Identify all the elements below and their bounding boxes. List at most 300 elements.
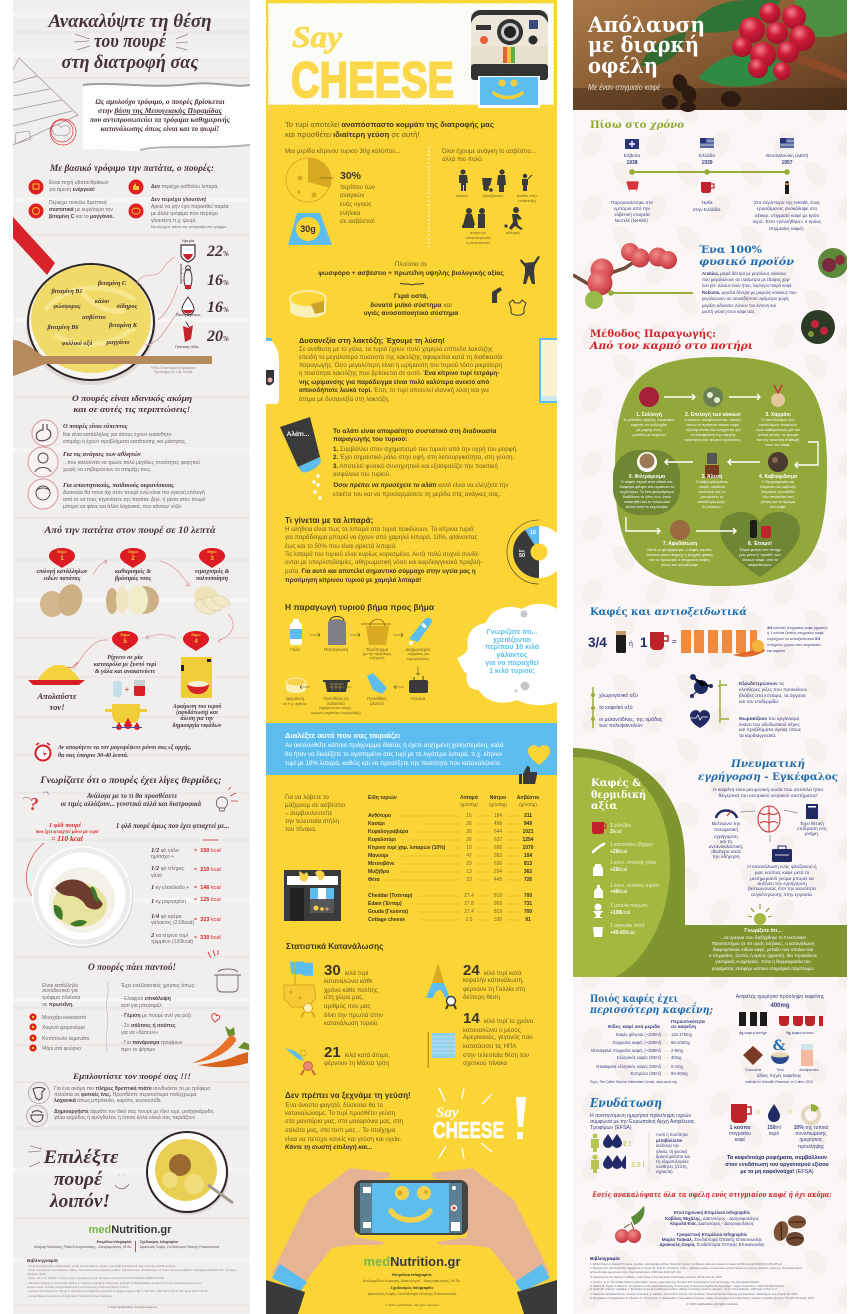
references: © 2015 medNutrition. All rights reserved [686,1302,738,1306]
stat: USA: 14 κιλά τυρί το χρόνο [463,1010,534,1027]
people needing calcium: παιδιά στην [517,193,537,198]
blue banner [266,723,557,775]
safe caffeine intake: Institute for Scientific Research on Coffee, 2015 [745,1080,813,1084]
timeline: Νεστλέ (Nestlé). [615,217,649,224]
table: cheese nutrition: 29 [466,861,472,867]
alternative uses list: - Για πανάρισμα τροφίμων [121,1040,183,1046]
mental alertness section: εγρήγορση - Εγκέφαλος [698,770,838,783]
clock note: Αν αποφύγετε να τον μαγειρέψετε μόνοι σας εξ αρχής, [57,744,191,752]
table note: – συμβουλευτείτε [285,810,333,817]
mental alertness section: επίδραση στη [797,826,827,832]
pairing list: Μοσχάρι κοκκινιστό [42,1014,87,1021]
lactose text: οποιοδήποτε λευκό τυρί. Έτσι, το τυρί αποτελεί ιδανική λύση και για [299,387,489,394]
nutrient percentages: Πρόσληψη σε 1 φλ πουρέ [154,370,193,374]
antioxidant equation: και καρότα [767,649,786,653]
production steps row 2: (αφαίρεση και αποχή - [319,706,353,710]
title: στη διατροφή σας [62,52,199,73]
table: cheese nutrition: 726 [524,877,532,883]
hydration equation [725,1104,829,1175]
timeline: Θεσσαλονίκη (ΔΕΘ) [766,153,809,159]
process blob: ταξινομούνται και ελέγχονται για [686,427,741,432]
antioxidant effects [690,674,808,739]
icon: salt shaker [280,417,322,500]
caffeine table: Ντεκαφεϊνέ στιγμιαίος καφές (~200ml) [591,1048,662,1053]
torn paper intro: Ως αμυλούχο τρόφιμο, ο πουρές βρίσκεται [95,97,225,106]
lactose text: επειδή το μεγαλύτερο ποσοστό της λακτόζης αφαιρείται κατά τη διαδικασία [299,354,503,361]
hydration section: ηλικία, τη φυσική [656,1149,688,1154]
chart: fat range donut: 50 [519,553,525,559]
caffeine table: Πηγή: The Coffee Science Information Centre, www.cosic.org [590,1080,677,1084]
did you know text: διαφορετικών ειδών καφέ, μεταξύ των οποίων και [713,946,813,953]
taste text: στα μανιτάρια μας, στα μακαρόνια μας, στη [285,1118,404,1125]
heading: antioxidants: Καφές και αντιοξειδωτικά [590,606,747,618]
table: cheese nutrition: 700 [524,909,532,915]
plain puree callout: που έχει φτιαχτεί μόνο με νερό [35,829,99,835]
production steps row 2: καλούπια [327,701,345,706]
nutrient percentages: *ΗΠΑ Συνιστώμενη Ημερήσια [151,366,195,370]
people needing calcium [441,148,537,245]
antioxidant equation: ή [629,641,633,648]
mental alertness section: Πνευματική [730,757,805,770]
hero image [573,0,847,112]
step labels: τεμαχισμός & [195,568,230,575]
production steps row 1: Γάλα [290,647,300,652]
stat: France: δεύτερη θέση [463,994,500,1001]
stat: USA: Αμερικανός, γεγονός που [463,1034,533,1041]
hydration equation: 10% της τυπικά [794,1124,828,1131]
people needing calcium: ανάπτυξη [518,198,536,203]
pairing list: συνοδευτικό για [42,987,78,994]
enjoy plate [28,665,85,712]
taste text: είναι να πετύχει κανείς και γεύση και υγεία. [285,1136,402,1143]
rich in nutrients: δυνατό μυϊκό σύστημα και [370,302,452,309]
process blob: θη κόκκων. [702,504,722,509]
logo: medNutrition.gr [88,1224,172,1236]
chart: fat range donut: έως [519,549,525,553]
pairing list: σε πρωτεΐνη. [42,1002,74,1008]
benefits list [28,179,229,229]
natural product text: Robusta, μεγάλα δέντρα με μικρούς κόκκους που [702,290,797,295]
table: cheese nutrition: Λιπαρά [460,795,479,801]
antioxidant equation: περιέχουν τα αντιοξειδωτικά 5.5 [767,637,820,641]
antioxidant equation: 1 [640,635,648,650]
caffeine table: 65-100mg [671,1040,691,1045]
wooden spoon [13,340,212,376]
taste text: Ένα άνοστο φαγητό, δύσκολα θα το [284,1102,384,1109]
process blob: πτουν οι πράσινοι κόκκοι καφέ, [686,422,740,427]
enrich section: Εμπλουτίστε τον πουρέ σας !!! [72,1071,191,1081]
safe caffeine intake: άλλες πηγές καφεΐνης [757,1072,802,1078]
process blob: δίσματος προσδίδει [761,489,795,494]
caffeine table: Ντεκαφεϊνέ ελληνικός καφές (50ml) [596,1064,662,1069]
antioxidant effects: και τον επιδερμίδα. [739,699,779,705]
step labels: βράσιμός τους [114,575,151,582]
blue banner: τυρί με 10% λιπαρά, καθώς και να προσέξετε την ποσότητα που καταναλώνετε. [285,760,502,767]
caffeine table: Ποιός καφές έχει [590,993,678,1005]
title: Ανακαλύψτε τη θέση [48,11,212,32]
antioxidant compounds [591,687,663,729]
process blob: απαιτηθεί και το τελειωτικό [624,499,670,504]
natural product text: Ένα 100% [698,245,763,256]
mental alertness section: την οδήγηση [712,853,740,860]
title: του πουρέ [94,31,166,52]
caffeine table: 0-1mg [671,1064,684,1069]
flakes package: Αφαίρεση του νερού [172,703,221,710]
benefits list: Είναι πηγή υδατανθράκων [49,179,109,186]
process blob: Η θερμοκρασία και [762,479,794,484]
puree additions list: = 323 kcal [194,917,221,923]
timeline: Ελβετία [624,153,640,159]
rich in nutrients: υγιές ανοσοποιητικό σύστημα [364,310,458,317]
table: cheese nutrition: 362 [524,869,532,875]
safe caffeine intake: Σοκολάτα [745,1068,762,1072]
stat: Greece [284,961,383,1027]
heading: ideal cases [72,393,192,414]
references [27,1258,237,1309]
green calorie panel: 2kcal [610,829,622,835]
production steps row 1: πήγματος και [407,652,429,656]
process blob [613,357,827,586]
puree additions list: γάλακτος (210kcal) [151,919,194,926]
heading: ideal cases: και σε αυτές τις περιπτώσεις! [74,404,190,414]
green calorie panel: 1 σφηνάκι ποτό [610,922,645,929]
references: © 2014 medNutrition. All rights reserved [107,1305,157,1309]
icon: light bulb [748,904,772,925]
mental alertness section: Έχει θετική [799,820,824,827]
benefits list: γλουτένη π.χ. ψωμί. [151,217,196,224]
caffeine table: Καφές φίλτρου (~200ml) [616,1032,662,1037]
stat: France [426,962,526,1009]
bowl of puree [146,1131,233,1215]
flakes package: (αφυδάτωση) και [176,709,218,716]
pot of mashed potato: φυλλικό οξύ [62,340,92,347]
phone with cheese smile [354,1180,468,1235]
fat text: προτίμηση κίτρινου τυριού με χαμηλά λιπαρά! [285,577,421,584]
salt text: παραγωγής του τυριού: [333,436,407,443]
table note [285,794,346,833]
process blob: 6. Φιλτράρισμα [629,474,666,480]
process blob: Ο καβουρδισμένος [696,479,728,484]
hydration equation: με τα μη καφεϊνούχα! (EFSA) [740,1169,814,1175]
intro [285,122,494,138]
benefits list: συστατικά με κυριότερα την [49,206,113,213]
table: cheese nutrition: 383 [494,853,502,859]
safe caffeine intake: 5χ καφές/κούπα [786,1031,814,1035]
heading: calories: οι τιμές αλλάζουν... γευστικά αλλά και διατροφικά [61,801,202,808]
pot of mashed potato: σίδηρος [117,303,138,310]
hydration section: 2 l [623,1141,631,1148]
stat: Malta: φέρνουν τη Μάλτα τρίτη [324,1060,390,1067]
antioxidant equation: 3/4 κούπας στιγμιαίος καφέ (φραπέ) [767,626,828,630]
hydration section: Ενυδάτωση [589,1096,662,1110]
hydration section: δραστηριότητα και [656,1154,690,1159]
caffeine table: 115-175mg [671,1032,693,1037]
credits [34,1240,220,1252]
heading: production method: Από τον καρπό στο ποτήρι [589,339,753,352]
calcium scale: ενήλικα [340,210,361,217]
green calorie panel: 1 φλιτζάνι [610,822,631,829]
clock note: θα σας έπαιρνε 30-40 λεπτά. [58,752,129,759]
coffee cherries branch [573,243,693,309]
pot of mashed potato: κάλιο [95,298,109,305]
references: 7. Stavric B. Methylxanthines: Toxicity to humans. 2. Caffeine. Food Chem Toxicol. The American Chemical Society Meeting and Exposition. Washington, DC, August 28, 2005 [590,1292,798,1296]
table: cheese nutrition: 2.5 [466,917,473,923]
table: cheese nutrition: 23 [466,877,472,883]
table: cheese nutrition: 30 [466,829,472,835]
callout bubble: χρειάζονται [493,637,531,644]
benefits list: Περιέχει ποικίλα θρεπτικά [49,199,107,206]
natural product text: μεγαλώνουν σε οποιαδήποτε υψόμετρο χωρίς [702,296,789,301]
credits: Αδαμαρ Μαλιδάκη, Ρόλανδ Αυγουστάκης - Διατροφολόγος, M.Sc. [34,1245,132,1249]
say cheese slogan: CHEESE [433,1117,504,1143]
safe caffeine intake: 400mg [770,1003,790,1009]
timeline: εμπόριο από την [614,205,650,212]
heading: ideal cases: Ο πουρές είναι ιδανικός ακόμη [72,393,192,403]
hero image: Με έναν στιγμιαίο καφέ [588,83,660,92]
timeline [611,138,822,232]
heading: calories: ? [30,794,38,814]
step labels: & γάλα και ανακατεύετε [95,668,156,675]
heading: potato to puree: Από την πατάτα στον πουρέ σε 10 λεπτά [43,525,216,536]
caffeine table: Στιγμιαίος καφές (~200ml) [613,1040,662,1045]
people needing calcium: θηλάζουσες [483,193,503,198]
alternative uses list: πριν το ψήσιμο [121,1046,155,1053]
callout bubble: για να παραχθεί [485,660,539,667]
table: cheese nutrition: 10 [466,845,472,851]
table: cheese nutrition: Μανούρι [368,853,389,859]
heading: puree goes with everything: Ο πουρές πάει παντού! [88,962,176,972]
alternative uses list: - Σε σάλτσες ή σούπες [121,1023,176,1029]
alternative uses list: αντί για μπεσαμέλ [121,1002,162,1009]
process blob: για να προκύψει ο στιγμιαίος καφές, [649,557,711,562]
did you know text [709,928,817,971]
antioxidant equation: ή 1 κούπα ζεστός στιγμιαίος καφέ; [767,631,824,635]
table: cheese nutrition: 330 [494,917,502,923]
table: cheese nutrition: Ασβέστιο [517,795,539,801]
table: cheese nutrition: 819 [494,893,502,899]
heading: production method: Μέθοδος Παραγωγής: [590,327,716,340]
stat: Greece: 30 κιλά τυρί [324,962,369,979]
green calorie panel: 1 κουτ. σούπας γάλα [610,859,656,866]
icon: cherries with leaf [615,1206,645,1243]
timeline: 1938 [626,160,638,166]
lactose text: παραγωγής. Όσο μεγαλύτερη είναι η ωρίμανση του τυριού τόσο μικρότερη [299,362,502,369]
stat: Greece: στη χώρα μας, [324,994,364,1001]
ideal cases list: ...που καλούνται να τρώνε πολύ μεγάλες ποσότητες φαγητού [63,459,200,466]
safe caffeine intake [736,993,825,1084]
title [48,11,212,73]
nutrient percentages: Πεπτική οδός [175,344,199,349]
fat text: έως και το 50% που είναι αρκετά λιπαρά. [285,543,397,550]
heading: calories [23,775,238,814]
table: cheese nutrition: 27.4 [464,893,474,899]
did you know text: γαστρικές ενοχλήσεις. Ούτε η θερμοκρασία του [715,958,811,964]
table: cheese nutrition: 26 [466,837,472,843]
heading: potato basics: Με βασικό τρόφιμο την πατάτα, ο πουρές: [49,163,214,173]
closing message [28,1146,129,1212]
table: cheese nutrition: 636 [494,861,502,867]
taste text: καταναλώναμε. Το τυρί προσθέτει γεύση [285,1110,396,1117]
green calorie panel: 1 κουτ. σούπας σιρόπι [610,882,660,889]
pot of mashed potato: ασβέστιο [82,314,106,321]
references: 3. Statement on the Safety of Caffeine. Committee of the European Food Safety Authority, EFSA Journal, 2015. [590,1275,723,1279]
credits: Καβίλας Μιχάλης, Διαιτολόγος - Διατροφολόγος [665,1216,759,1221]
process blob: όλα απαιτείται στη [762,494,794,499]
potatoes illustration [40,584,230,617]
step badges: Βήμα [191,633,201,637]
process blob: 1. Συλλογή [636,412,662,418]
timeline: 1939 [701,160,713,166]
panel: say cheese infographic [258,0,565,1314]
ideal cases list: Ο πουρές είναι εύπεπτος [63,423,128,430]
antioxidant effects: έναντι του οξειδωτικού στρες [739,721,800,728]
table: cheese nutrition: 819 [494,909,502,915]
references: Βιβλιογραφία [590,1256,620,1261]
table: cheese nutrition: Cheddar (Τσένταρ) [368,893,413,899]
step badges: Βήμα [57,550,67,554]
table: cheese nutrition: Κεφαλογραβιέρα [368,829,409,835]
salt text: ετικέτα του και να προσαρμόσετε τη μερίδα στις ανάγκες σας. [333,491,501,498]
people needing calcium: άτομα με [470,230,486,235]
pairing list: Χοιρινό ψαρονέφρι [42,1024,85,1031]
table: cheese nutrition: Μυζήθρα [368,869,390,875]
antioxidant equation [588,626,828,657]
pot of mashed potato: βιταμίνη Β6 [46,324,79,331]
hydration section: μεταβάλλεται [656,1138,683,1143]
table: cheese nutrition: 813 [524,861,532,867]
hydration equation: ημερήσιας [799,1136,823,1143]
process blob: διάρκεια του καβουρ- [760,484,797,489]
table: cheese nutrition: 695 [494,845,502,851]
stat: Malta: 21 κιλά κατά άτομο, [324,1044,390,1061]
table: cheese nutrition: Είδη τυριών [368,795,397,801]
caffeine table: 40mg [671,1055,682,1060]
timeline: ελβετική εταιρεία [614,211,650,218]
callout bubble [457,604,557,705]
nutrient percentages: 16% [207,272,229,289]
hydration equation: πρόσληψης [798,1143,825,1150]
step badges: 2 [131,555,135,562]
alternative uses list [120,982,195,1053]
process blob: όπως τον γνωρίζουμε. [661,562,699,567]
nutrient percentages: 20% [206,328,229,345]
table: cheese nutrition: 26 [466,821,472,827]
did you know text: Πανεπιστήμιο σε 40 υγιείς ενήλικες, η κατανάλωση [712,940,815,946]
green calorie panel: 1 κουταλάκι ζάχαρη [610,841,653,848]
people needing calcium: ή οστεοπενία [466,240,490,245]
references: 8. Zampelas A, Panagiotakos D, Pitsavos C, Chrysohoou C, Stefanadis C. Associations between coffee consumption and inflammatory markers in healthy persons: The ATTICA study, 2015 [590,1296,814,1300]
plain puree callout: 1 φλδ πουρέ [49,822,81,829]
mental alertness section: Βελτιώνει την [712,820,741,827]
hydration equation: Τα καφεϊνούχα ροφήματα, συμβάλλουν [727,1155,827,1161]
salt text: Όσοι πρέπει να προσέχετε το αλάτι καλό είναι να ελέγξετε την [333,482,508,489]
table: cheese nutrition: Gouda (Γκούντα) [368,909,408,915]
fat text: ονται με υπερλιπιδαιμίες, αθηρωματική νόσο και καρδιαγγειακά προβλή- [285,559,482,566]
table: cheese nutrition: Κίτρινο τυρί χαμ. λιπαρών (10%) [368,845,446,851]
hydration equation: = [756,1108,761,1117]
production steps row 1: Τυρόπηγμα [366,647,389,652]
hydration section: 2.5 l [631,1162,645,1169]
table: cheese nutrition: 700 [524,893,532,899]
taste text: σαλάτα μας, στο τοστ μας... Το στοίχημα [285,1127,396,1134]
people needing calcium: αλλά πιο πολύ: [442,156,484,163]
pairing list: Ψάρι στο φούρνο [42,1045,81,1052]
hydration section: τις κλιματολογικές [656,1159,689,1164]
enrich section: λαχανικά όπως μπρόκολο, καρότο, κουνουπίδι. [54,1097,162,1104]
salt text: 3. Αποτελεί φυσικό συντηρητικό και εξασφαλίζει την ποιοτική [333,463,498,470]
step labels: Ρίχνετε σε μία [107,654,143,661]
credits: Σχεδιασμός Infographic [391,1286,433,1290]
hydration equation: νερό [769,1130,779,1137]
calcium scale: 30% [340,170,362,182]
heading: production method [589,327,753,352]
table: cheese nutrition: Φέτα [368,877,380,883]
pyramid sketch [13,58,78,145]
closing message: λοιπόν! [49,1192,110,1212]
process blob: Τελικά φτάνει στο ποτήρι [739,547,781,552]
fat text: Τα λιπαρά του τυριού είναι κυρίως κορεσμένα. Αυτά πολύ συχνά συνδέ- [285,551,480,558]
plate with meat [32,846,133,948]
table: cheese nutrition: 1070 [522,845,534,851]
stat: Greece: αριθμός που μας [324,1003,370,1010]
process blob: Ο καφές περνά από ειδικά και- [621,479,674,484]
process blob: μας μόνο η "αγαθά" των [739,552,781,557]
process blob: 8. Έτοιμο! [748,541,772,547]
pairing list [29,982,108,1052]
process blob: καφές αλέθεται [699,484,725,489]
hero image: με διαρκή [588,32,699,57]
mental alertness section: διεγερτικό του κεντρικού νευρικού συστήματος! [718,792,818,799]
salt text: Το αλάτι είναι απαραίτητο συστατικό στη διαδικασία [333,427,496,435]
green calorie panel: Καφές & [591,778,641,789]
taste text: Δεν πρέπει να ξεχνάμε τη γεύση! [285,1091,411,1100]
hydration equation: στιγμιαίου [729,1131,751,1137]
salt text [333,427,518,498]
natural product text: φυσικό προϊόν [699,257,794,268]
benefits list: βιταμίνη C και το μαγγάνιο. [49,214,114,220]
table: cheese nutrition: Νάτριο [490,795,506,801]
step labels: καθαρισμός & [115,568,151,575]
process blob: διαδίδεται το όλον έως όπου [623,494,671,499]
step badges: 4 [194,638,198,645]
stat: Greece: καταναλώνει κάθε [324,978,373,985]
people needing calcium: έγκυες [456,193,468,198]
process blob: εκχύλισμα. Το έτσι φιλτράρισμα [620,489,675,494]
table: cheese nutrition: Cottage cheese [368,917,405,923]
pot of mashed potato: βιταμίνη Β1 [50,288,83,295]
pot of mashed potato: φώσφορος [53,303,81,310]
hydration equation: καφέ [735,1136,746,1143]
milk bottle, can and yellow pot [105,680,147,730]
credits: Καλλιαρίδου Κυριακή, Διαιτολόγος - Διατροφολόγος, M.Sc. [363,1279,461,1283]
step badges: Βήμα [128,550,138,554]
hydration section: Τροφίμων (EFSA) [590,1125,632,1131]
process blob: ποιότητας του τελικού προϊόντος. [684,437,742,442]
flakes package: άλεση για την [181,715,214,722]
step labels: επιλογή κατάλληλων [37,568,88,575]
production steps row 2 [283,673,428,715]
step badges: Βήμα [207,550,217,554]
hydration section: Η συστηνόμενη ημερήσια πρόσληψη υγρών [590,1112,691,1119]
mental alertness section: πνευματική [714,826,738,833]
puree additions list: γάλα [151,872,162,879]
production steps row 1: Διαχωρισμός [405,647,431,652]
step badges: 1 [60,555,64,562]
green calorie panel [573,748,847,977]
process blob: του καφέ. [770,504,786,509]
fat text: για παράδειγμα μπορεί να έχουν από χαμηλά λιπαρά, 10%, φτάνοντας [285,534,478,541]
safe caffeine intake: & [773,1038,786,1054]
